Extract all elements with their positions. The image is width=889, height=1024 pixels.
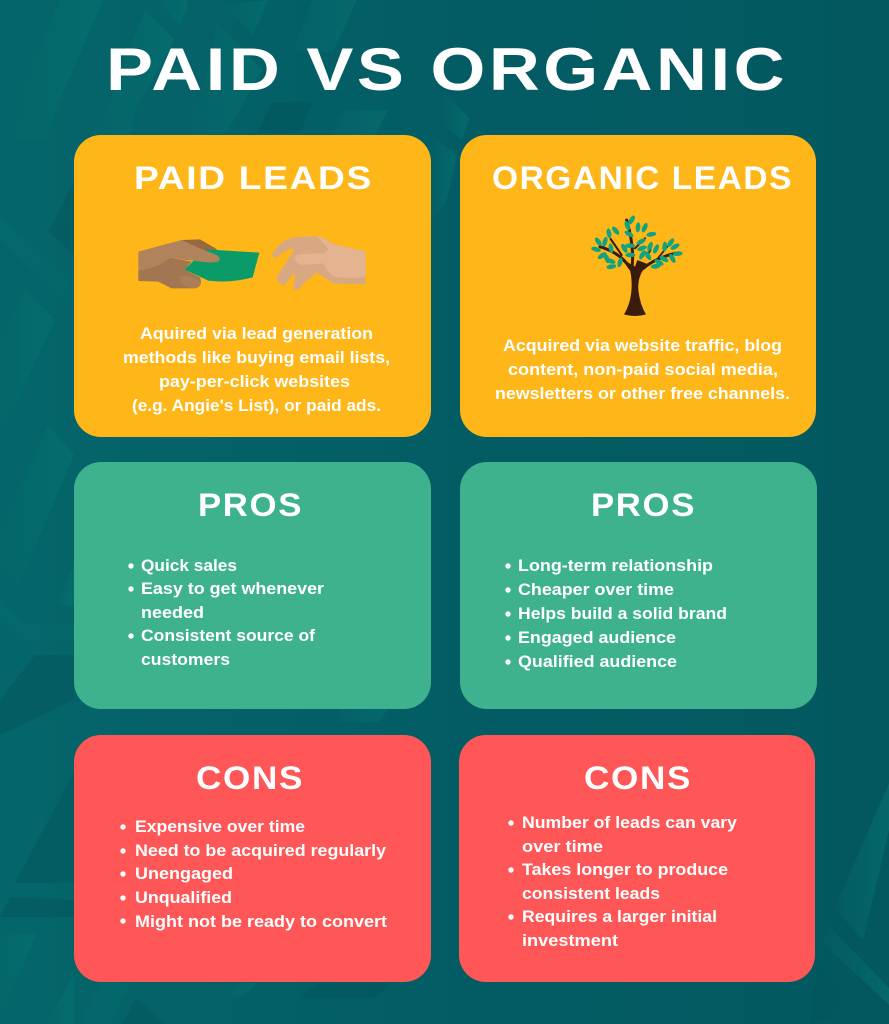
list: paid pros: needed <box>141 603 204 622</box>
list: organic pros: Long-term relationship <box>518 556 713 575</box>
description: organic leads <box>495 336 790 403</box>
heading: paid leads: PAID LEADS <box>134 160 373 196</box>
heading: organic leads: ORGANIC LEADS <box>492 160 793 196</box>
panel: paid leads <box>74 135 431 437</box>
heading: organic pros: PROS <box>591 487 696 523</box>
list: organic cons: over time <box>522 837 603 856</box>
panel: organic cons <box>459 735 815 982</box>
icon: hands exchanging money <box>138 236 366 290</box>
heading: organic cons: CONS <box>584 760 692 796</box>
heading: paid pros: PROS <box>198 487 303 523</box>
list: organic cons <box>508 813 738 950</box>
list: organic cons: investment <box>522 931 618 950</box>
panel: organic leads <box>460 135 816 437</box>
icon: tree <box>591 215 683 316</box>
list: organic cons: consistent leads <box>522 884 660 903</box>
list: paid pros <box>128 556 324 669</box>
list: paid pros: Quick sales <box>141 556 237 575</box>
description: paid leads: Aquired via lead generation <box>140 324 373 343</box>
panel: organic pros <box>460 462 817 709</box>
description: paid leads: (e.g. Angie's List), or paid ads. <box>132 396 381 415</box>
description: paid leads: pay-per-click websites <box>159 372 350 391</box>
list: organic pros: Engaged audience <box>518 628 676 647</box>
list: paid cons: Expensive over time <box>135 817 305 836</box>
heading: paid cons: CONS <box>196 760 304 796</box>
description: paid leads <box>123 324 390 415</box>
list: organic pros: Qualified audience <box>518 652 677 671</box>
list: organic cons: Number of leads can vary <box>522 813 738 832</box>
list: organic cons: Requires a larger initial <box>522 907 717 926</box>
description: organic leads: content, non-paid social media, <box>508 360 778 379</box>
title: PAID VS ORGANIC <box>106 36 788 103</box>
list: organic cons: Takes longer to produce <box>522 860 728 879</box>
list: paid cons: Unengaged <box>135 864 233 883</box>
list: paid pros: Easy to get whenever <box>141 579 324 598</box>
list: paid cons: Need to be acquired regularly <box>135 841 387 860</box>
list: organic pros <box>505 556 727 671</box>
panel: paid cons <box>74 735 431 982</box>
list: paid pros: Consistent source of <box>141 626 315 645</box>
panel: paid pros <box>74 462 431 709</box>
list: paid cons: Might not be ready to convert <box>135 912 387 931</box>
list: paid cons: Unqualified <box>135 888 232 907</box>
description: organic leads: Acquired via website traffic, blog <box>503 336 782 355</box>
description: paid leads: methods like buying email lists, <box>123 348 390 367</box>
list: paid pros: customers <box>141 650 230 669</box>
list: paid cons <box>120 817 387 931</box>
list: organic pros: Helps build a solid brand <box>518 604 727 623</box>
list: organic pros: Cheaper over time <box>518 580 674 599</box>
description: organic leads: newsletters or other free channels. <box>495 384 790 403</box>
